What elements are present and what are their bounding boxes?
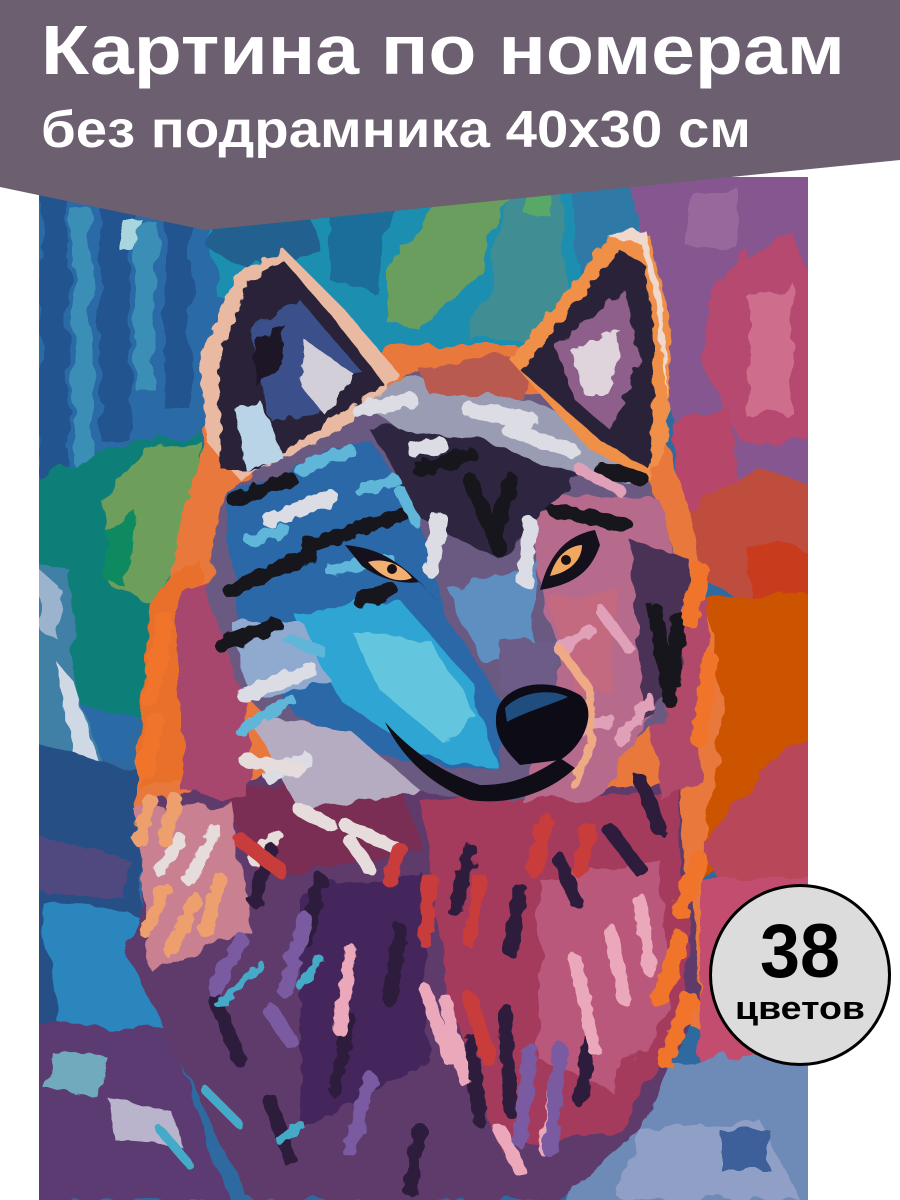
teal strokes — [160, 960, 320, 1165]
chest peach strokes — [140, 800, 220, 950]
title: Картина по номерам — [41, 11, 845, 89]
painting: wolf — [20, 160, 830, 1200]
wolf fur and body — [130, 345, 722, 1200]
orange halo — [135, 345, 722, 1030]
head base — [205, 370, 690, 800]
pink face strokes — [560, 470, 650, 740]
chest violet strokes — [215, 920, 560, 1150]
blue left face — [225, 440, 500, 770]
nose and mouth — [496, 684, 588, 765]
left ear — [200, 250, 400, 480]
face dark strokes — [222, 455, 680, 700]
right eye — [540, 530, 600, 590]
forehead dark — [370, 422, 578, 558]
chest pink strokes — [340, 900, 650, 1170]
left eye — [345, 545, 438, 602]
face mid-blue strokes — [240, 450, 415, 730]
header banner — [0, 0, 900, 230]
face light strokes — [245, 400, 570, 775]
chest red strokes — [240, 820, 590, 1060]
right ear — [510, 235, 670, 480]
badge: 38 colours: цветов — [735, 990, 865, 1026]
chest white strokes — [160, 760, 400, 880]
fur brush strokes — [140, 400, 710, 1190]
orange side strokes — [145, 570, 710, 1060]
eyes and nose — [345, 530, 600, 801]
painting background — [20, 160, 830, 1200]
subtitle: без подрамника 40х30 см — [41, 101, 751, 159]
badge: 38 colours: 38 — [760, 909, 840, 994]
peach muzzle edge — [560, 650, 592, 785]
badge: 38 colours — [710, 886, 890, 1064]
chest fur — [130, 760, 700, 1200]
chest dark strokes — [215, 780, 660, 1190]
ears — [200, 230, 670, 480]
right side pink face fur — [520, 490, 690, 800]
